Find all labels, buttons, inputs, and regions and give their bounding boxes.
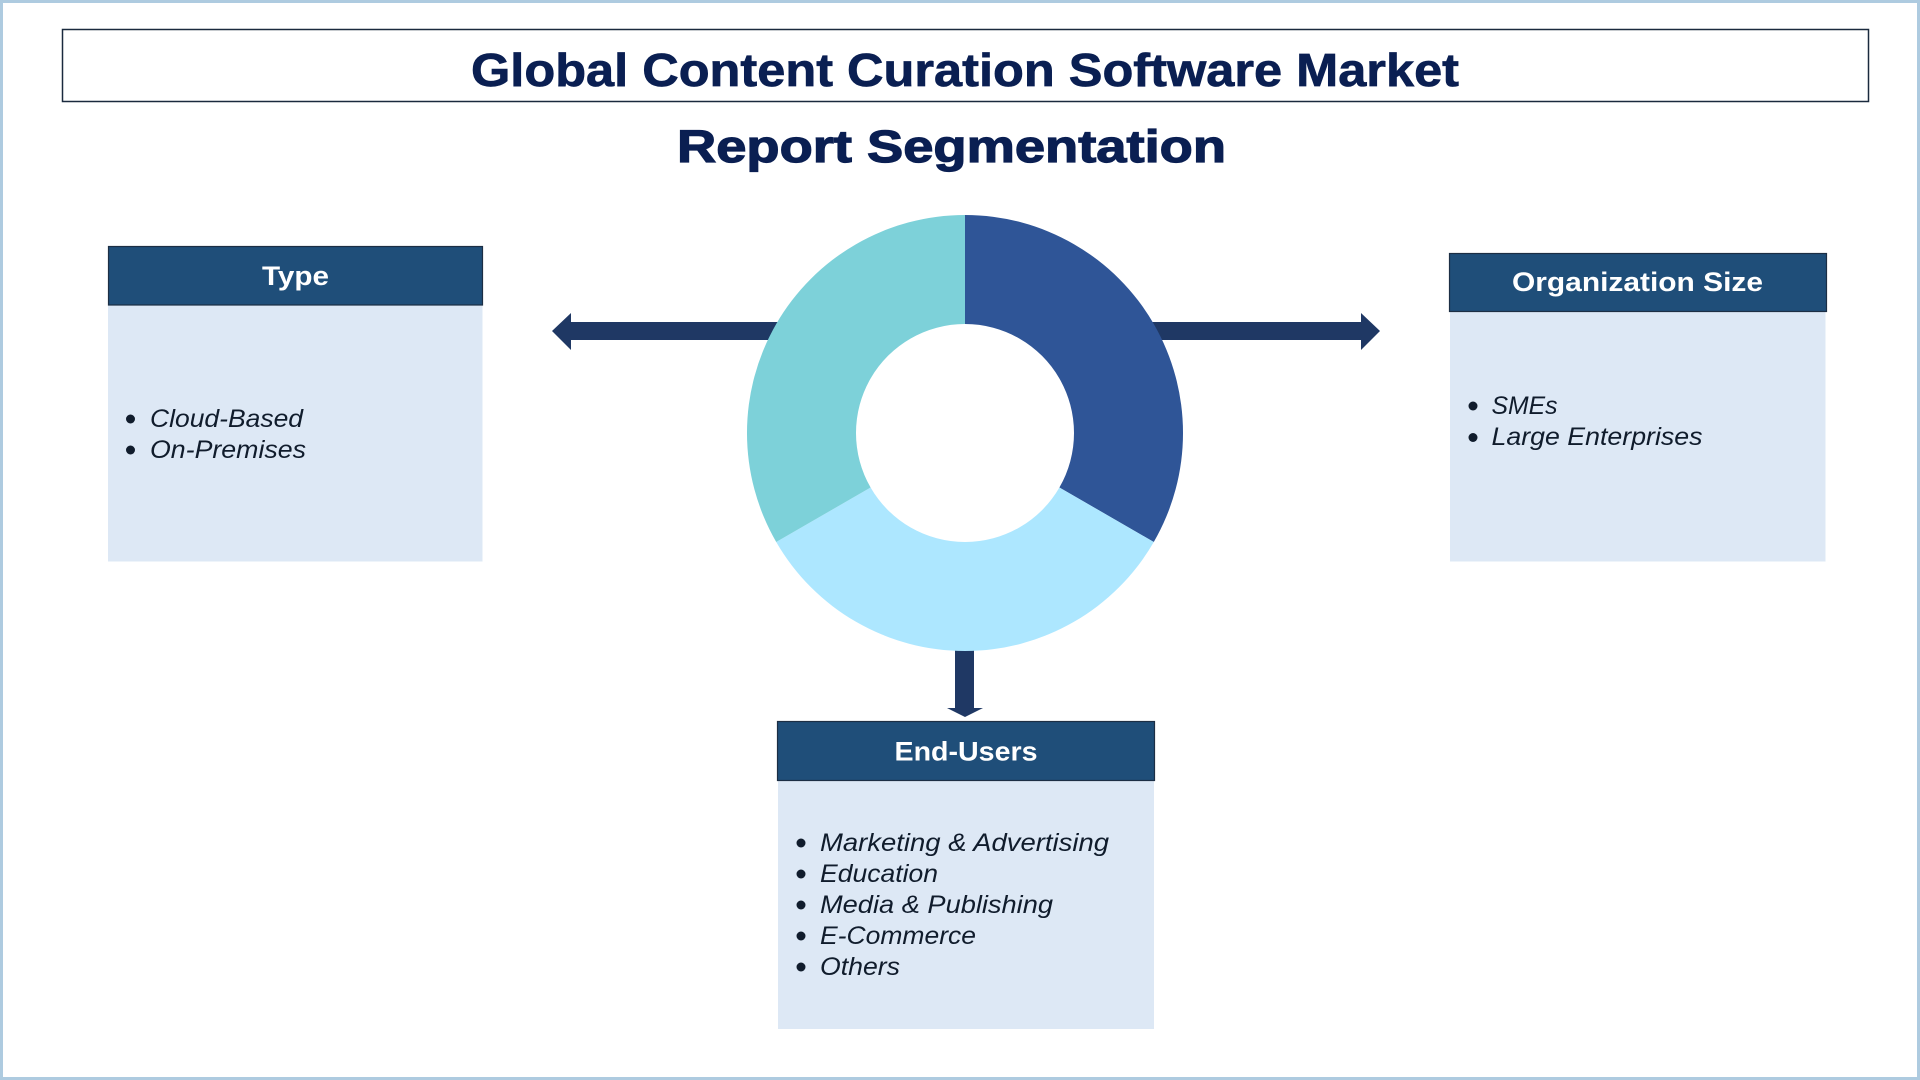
donut chart xyxy=(747,215,1183,651)
list: Organization Size items: SMEs xyxy=(1492,392,1558,420)
arrow: to Type xyxy=(552,313,780,350)
segment: dark blue xyxy=(965,215,1183,542)
list: Type items xyxy=(126,405,306,464)
header: Type: Type xyxy=(262,261,329,291)
header: Organization Size xyxy=(1450,254,1826,312)
list: End-Users items: Marketing & Advertising xyxy=(820,829,1109,857)
panel: Type xyxy=(108,246,482,562)
list: End-Users items: Media & Publishing xyxy=(820,891,1053,919)
list: End-Users items: Education xyxy=(820,860,938,888)
list: End-Users items: Others xyxy=(820,953,900,981)
panel: End-Users xyxy=(778,722,1154,1029)
segment: light blue xyxy=(776,488,1154,651)
list: Organization Size items: Large Enterprises xyxy=(1492,423,1702,451)
segment: teal xyxy=(747,215,965,542)
list: Organization Size items xyxy=(1468,392,1702,451)
title box xyxy=(62,30,1868,102)
panel: Organization Size xyxy=(1450,254,1826,562)
header: Organization Size: Organization Size xyxy=(1512,267,1763,297)
list: Type items: Cloud-Based xyxy=(150,405,304,433)
arrow: to Organization Size xyxy=(1150,313,1380,350)
list: End-Users items: E-Commerce xyxy=(820,922,976,950)
list: End-Users items xyxy=(796,829,1109,981)
title box: Global Content Curation Software Market xyxy=(471,44,1459,96)
header: End-Users: End-Users xyxy=(894,736,1038,766)
list: Type items: On-Premises xyxy=(150,436,306,464)
subtitle: Report Segmentation xyxy=(677,121,1226,172)
header: End-Users xyxy=(778,722,1154,780)
arrow: to End-Users xyxy=(947,640,983,717)
header: Type xyxy=(108,246,482,305)
